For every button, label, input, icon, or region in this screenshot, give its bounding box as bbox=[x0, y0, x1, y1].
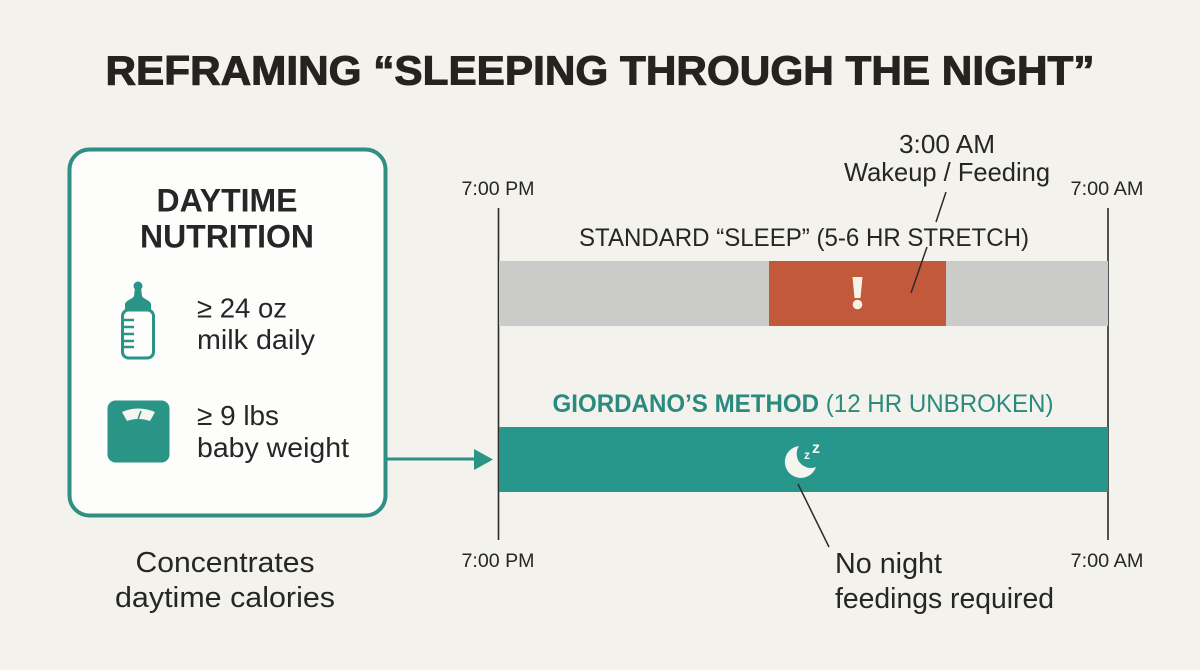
label: 7:00 PM top: 7:00 PM bbox=[462, 179, 534, 200]
text: milk amount: milk daily bbox=[197, 324, 315, 355]
icon: baby bottle bbox=[122, 282, 154, 358]
callout: 3:00 AM wakeup bbox=[844, 129, 1050, 187]
icon: moon and zzz: z bbox=[804, 448, 810, 462]
text: milk amount: ≥ 24 oz bbox=[197, 292, 287, 324]
panel heading: DAYTIME bbox=[156, 182, 298, 218]
title: REFRAMING “SLEEPING THROUGH THE NIGHT” bbox=[106, 48, 1094, 94]
caption: concentrates daytime calories bbox=[115, 547, 335, 614]
panel: daytime nutrition bbox=[70, 150, 386, 516]
caption: concentrates daytime calories: daytime calories bbox=[115, 582, 335, 614]
icon: moon and zzz: z bbox=[812, 440, 820, 457]
caption: no night feedings required: feedings required bbox=[835, 583, 1054, 615]
panel heading bbox=[140, 182, 314, 254]
icon: moon and zzz bbox=[785, 440, 820, 478]
bar: 12 hour sleep bbox=[499, 427, 1108, 492]
text: baby weight bbox=[197, 400, 349, 463]
text: baby weight: ≥ 9 lbs bbox=[197, 400, 279, 431]
timeline end line bbox=[1107, 208, 1109, 540]
label: 7:00 PM bottom: 7:00 PM bbox=[462, 551, 534, 572]
text: baby weight: baby weight bbox=[197, 432, 349, 463]
leader line: no night feedings bbox=[798, 484, 829, 547]
leader line: wakeup bbox=[911, 192, 946, 293]
bar: standard sleep bbox=[499, 261, 1108, 326]
panel heading: NUTRITION bbox=[140, 218, 314, 254]
bar segment: wakeup bbox=[769, 261, 946, 326]
callout: 3:00 AM wakeup: Wakeup / Feeding bbox=[844, 157, 1050, 187]
caption: no night feedings required bbox=[835, 548, 1054, 615]
callout: 3:00 AM wakeup: 3:00 AM bbox=[899, 129, 995, 159]
label: 7:00 AM bottom: 7:00 AM bbox=[1070, 551, 1144, 572]
icon: weight scale bbox=[108, 400, 170, 462]
label: 7:00 AM top: 7:00 AM bbox=[1070, 179, 1144, 200]
caption: no night feedings required: No night bbox=[835, 548, 942, 580]
heading: Giordano's method: GIORDANO’S METHOD (12 HR UNBROKEN) bbox=[552, 390, 1054, 418]
caption: concentrates daytime calories: Concentrates bbox=[136, 547, 314, 579]
arrow: nutrition to method bbox=[387, 449, 493, 470]
text: milk amount bbox=[197, 292, 315, 355]
timeline start line bbox=[498, 208, 500, 540]
icon: exclamation mark bbox=[852, 277, 862, 309]
heading: standard sleep: STANDARD “SLEEP” (5-6 HR STRETCH) bbox=[579, 224, 1029, 252]
